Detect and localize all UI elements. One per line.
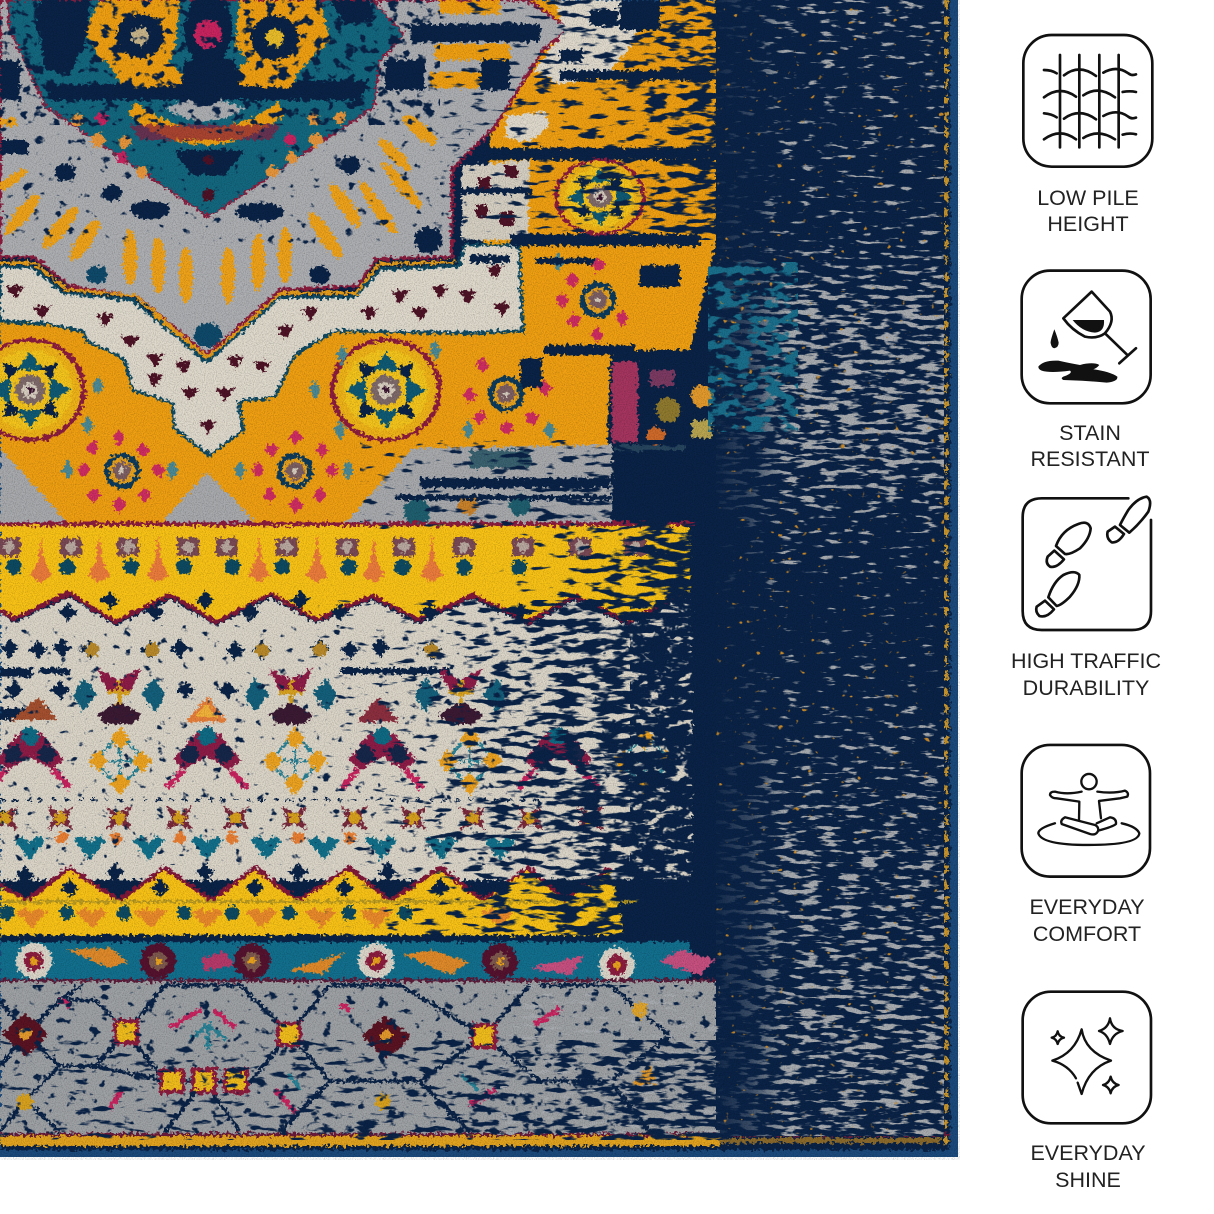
light grey distressed streaks (716, 0, 944, 1136)
icon: seated person on rug (1022, 745, 1150, 877)
upper golden corner (0, 0, 716, 445)
icon block: everyday comfort (1022, 745, 1150, 946)
navy speck rows (0, 590, 530, 720)
medallion grey field (0, 0, 569, 355)
upper right grey zone patches (385, 0, 640, 240)
label: high traffic durability: HIGH TRAFFIC (1011, 649, 1161, 673)
diamond motifs (88, 727, 677, 795)
navy and pink block right of gold (612, 350, 717, 520)
yellow border band (0, 522, 695, 622)
light grey streaks lower left of border (500, 985, 720, 1135)
label: everyday shine: EVERYDAY (1030, 1141, 1146, 1165)
arc motifs (0, 726, 598, 788)
label: high traffic durability: DURABILITY (1023, 676, 1149, 700)
navy specks, lattice (0, 985, 720, 1135)
distressed navy overlay, gold strip (360, 440, 730, 530)
label: everyday shine: SHINE (1055, 1168, 1121, 1192)
grey lattice band (0, 982, 716, 1136)
icon: spilled wine glass (1022, 271, 1151, 403)
distressed navy overlay, upper (440, 0, 730, 240)
paper grain (0, 0, 950, 1150)
distressed navy overlay, yellow band end (480, 526, 730, 606)
label: low pile height: LOW PILE (1037, 186, 1139, 210)
cream band motifs (6, 255, 511, 434)
icon block: everyday shine (1023, 992, 1151, 1192)
teal medallion (8, 0, 404, 217)
label: stain resistant: STAIN (1059, 421, 1121, 445)
teal flower band (0, 936, 760, 983)
icon block: low pile height (1023, 35, 1152, 236)
label: low pile height: HEIGHT (1047, 212, 1129, 236)
bottom gold edge (0, 1133, 950, 1146)
blotches softening cream band end (630, 600, 720, 890)
small X row (0, 806, 603, 830)
lower zigzag line (0, 868, 610, 900)
icon: low pile weave (1023, 35, 1152, 167)
distressed navy overlay, lattice band (0, 1040, 730, 1140)
navy specks, grey field (0, 125, 470, 245)
orange triangles (12, 697, 399, 722)
gold diamond panels (0, 320, 607, 524)
gold flecks in right border (716, 0, 944, 1136)
cream central band (0, 590, 692, 880)
distressed navy overlay, cream band (280, 600, 730, 940)
gold trim line (0, 262, 455, 358)
gold panel medallions (330, 338, 442, 442)
label: everyday comfort: COMFORT (1033, 922, 1141, 946)
icon: footprints (1023, 497, 1151, 630)
large X motifs (73, 668, 507, 724)
icon block: high traffic durability (1011, 497, 1161, 700)
label: everyday comfort: EVERYDAY (1029, 895, 1145, 919)
navy specks, medallion (0, 0, 440, 125)
right navy field (716, 0, 944, 1136)
right rug gold edge (944, 0, 948, 1145)
icon: sparkles (1023, 992, 1151, 1123)
medallion gold and navy core (35, 0, 375, 201)
teal tint inside right field (708, 262, 798, 432)
upper zigzag line (0, 593, 680, 622)
grey strip navy streaks and flowers (395, 450, 610, 525)
panel: rug photograph (0, 0, 958, 1157)
grey strip under gold band (0, 445, 612, 525)
rug pattern field (0, 0, 950, 1150)
icon block: stain resistant (1022, 271, 1151, 471)
inner navy fade of right field (716, 0, 786, 1136)
medallion circle upper right (554, 159, 646, 235)
teal triangle row (0, 800, 540, 860)
cream stepped band (0, 245, 523, 455)
label: stain resistant: RESISTANT (1030, 447, 1150, 471)
navy bars across gold corner (480, 148, 716, 160)
rug edge binding (0, 0, 958, 1157)
grey field flames and navy specks (0, 60, 442, 347)
gold panel rosettes and small diamonds (62, 252, 680, 513)
lower yellow band (0, 862, 640, 935)
navy specks, cream band (0, 625, 720, 865)
